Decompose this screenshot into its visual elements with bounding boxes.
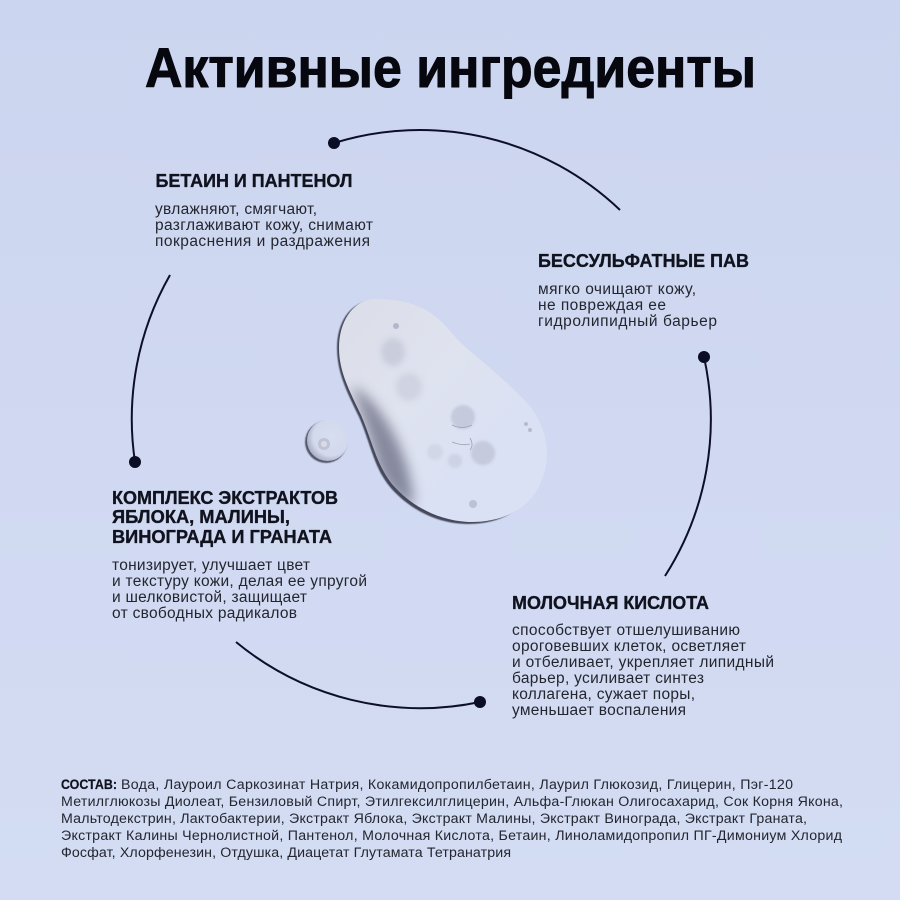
block: lactic acid: способствует отшелушиванию xyxy=(512,622,740,639)
block: extract complex: и текстуру кожи, делая ее упругой xyxy=(112,573,367,590)
block: extract complex: от свободных радикалов xyxy=(112,605,297,622)
block: sulfate-free surfactants: мягко очищают кожу, xyxy=(538,281,696,298)
block: sulfate-free surfactants: не повреждая ее xyxy=(538,297,666,314)
block: betaine and panthenol xyxy=(155,170,373,250)
block: extract complex: тонизирует, улучшает цвет xyxy=(112,557,310,574)
block: lactic acid: барьер, усиливает синтез xyxy=(512,670,704,687)
ingredients list: СОСТАВ: xyxy=(61,777,117,792)
block: betaine and panthenol: БЕТАИН И ПАНТЕНОЛ xyxy=(156,170,352,191)
block: extract complex: ВИНОГРАДА И ГРАНАТА xyxy=(112,526,332,547)
ingredients list xyxy=(61,777,843,861)
arc: top right xyxy=(334,130,620,210)
block: sulfate-free surfactants xyxy=(538,250,749,330)
ingredients list: Мальтодекстрин, Лактобактерии, Экстракт Яблока, Экстракт Малины, Экстракт Винограда, Экстракт Граната, xyxy=(61,811,807,827)
block: betaine and panthenol: увлажняют, смягчают, xyxy=(155,201,317,218)
ingredients list: Экстракт Калины Чернолистной, Пантенол, Молочная Кислота, Бетаин, Линоламидопропил ПГ-Димониум Хлорид xyxy=(61,828,843,844)
block: betaine and panthenol: разглаживают кожу, снимают xyxy=(155,217,373,234)
ingredients list: Вода, Лауроил Саркозинат Натрия, Кокамидопропилбетаин, Лаурил Глюкозид, Глицерин, Пэг-120 xyxy=(121,777,793,793)
block: lactic acid: МОЛОЧНАЯ КИСЛОТА xyxy=(512,592,709,613)
block: lactic acid: ороговевших клеток, осветляет xyxy=(512,638,746,655)
dot: bottom xyxy=(474,696,486,708)
ingredients list: Метилглюкозы Диолеат, Бензиловый Спирт, Этилгексилглицерин, Альфа-Глюкан Олигосахарид, Сок Корня Якона, xyxy=(61,794,843,810)
small drop xyxy=(305,420,348,463)
block: extract complex xyxy=(112,487,367,622)
block: sulfate-free surfactants: гидролипидный барьер xyxy=(538,313,717,330)
block: sulfate-free surfactants: БЕССУЛЬФАТНЫЕ ПАВ xyxy=(538,250,749,271)
block: lactic acid: коллагена, сужает поры, xyxy=(512,686,695,703)
dot: right xyxy=(698,351,710,363)
block: lactic acid: уменьшает воспаления xyxy=(512,702,686,719)
arc: right xyxy=(665,357,711,576)
product smear image xyxy=(305,299,547,524)
circular arrows xyxy=(132,130,711,708)
block: extract complex: ЯБЛОКА, МАЛИНЫ, xyxy=(112,506,290,527)
block: extract complex: и шелковистой, защищает xyxy=(112,589,307,606)
block: lactic acid: и отбеливает, укрепляет липидный xyxy=(512,654,774,671)
large drop shadow xyxy=(337,301,515,524)
block: extract complex: КОМПЛЕКС ЭКСТРАКТОВ xyxy=(112,487,338,508)
block: lactic acid xyxy=(512,592,774,719)
ingredients list: Фосфат, Хлорфенезин, Отдушка, Диацетат Глутамата Тетранатрия xyxy=(61,845,511,861)
drop shading and bubbles xyxy=(352,323,532,508)
arc: left xyxy=(132,275,170,462)
title: Активные ингредиенты xyxy=(145,36,756,99)
dot: top xyxy=(328,137,340,149)
dot: left xyxy=(129,456,141,468)
arc: bottom xyxy=(236,642,480,708)
block: betaine and panthenol: покраснения и раздражения xyxy=(155,233,370,250)
large drop body xyxy=(339,299,547,522)
